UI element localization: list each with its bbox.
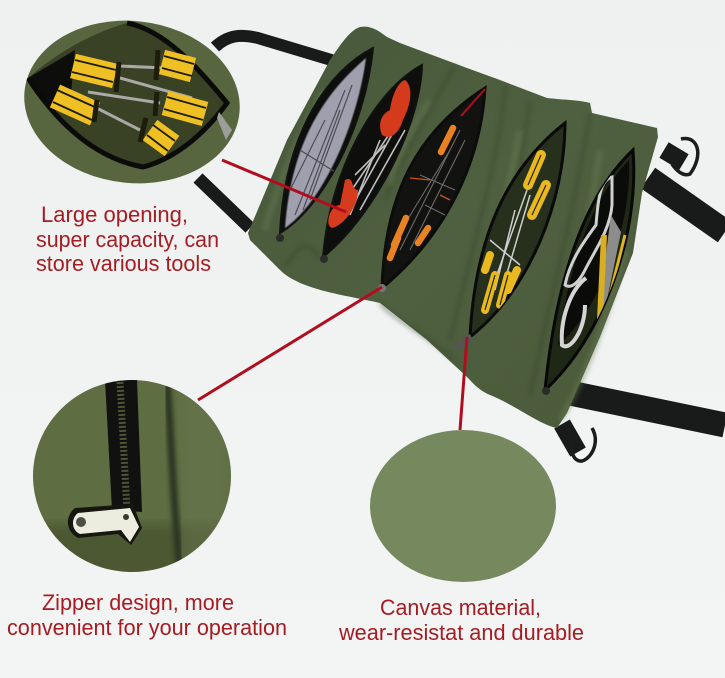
pocket 3: orange-handled tools xyxy=(382,88,485,288)
caption: canvas material: Canvas material, xyxy=(380,595,541,620)
pointer line: large opening xyxy=(222,160,346,212)
caption: zipper design: Zipper design, more xyxy=(42,590,234,615)
caption: large opening: store various tools xyxy=(36,251,211,276)
caption: large opening: super capacity, can xyxy=(36,227,219,252)
bag body xyxy=(248,27,658,428)
pointer line: top of third pocket xyxy=(461,89,485,116)
pocket 1: silver tools xyxy=(280,48,373,233)
caption: canvas material: wear-resistat and durable xyxy=(338,620,584,645)
pocket 4: yellow-handled tools xyxy=(470,123,565,337)
caption: large opening xyxy=(36,202,219,276)
tool roll bag photo xyxy=(198,27,725,461)
caption: zipper design xyxy=(7,590,287,640)
caption: zipper design: convenient for your operation xyxy=(7,615,287,640)
pocket 5: pliers and utility knife xyxy=(545,150,634,390)
pocket 2: red-handled tools xyxy=(323,65,422,257)
screwdrivers xyxy=(53,50,206,151)
fabric highlights xyxy=(265,90,625,420)
detail circle: canvas material xyxy=(370,430,556,582)
D rings xyxy=(571,138,698,461)
caption: canvas material xyxy=(338,595,584,645)
fabric folds xyxy=(285,65,590,395)
pointer line: canvas xyxy=(460,337,467,430)
detail circle: zipper close-up xyxy=(33,380,231,572)
black straps xyxy=(198,36,725,452)
pointer line: zipper xyxy=(198,287,382,400)
detail circle: open pocket with screwdrivers xyxy=(24,20,240,184)
zipper pulls xyxy=(276,234,550,395)
caption: large opening: Large opening, xyxy=(41,202,188,227)
